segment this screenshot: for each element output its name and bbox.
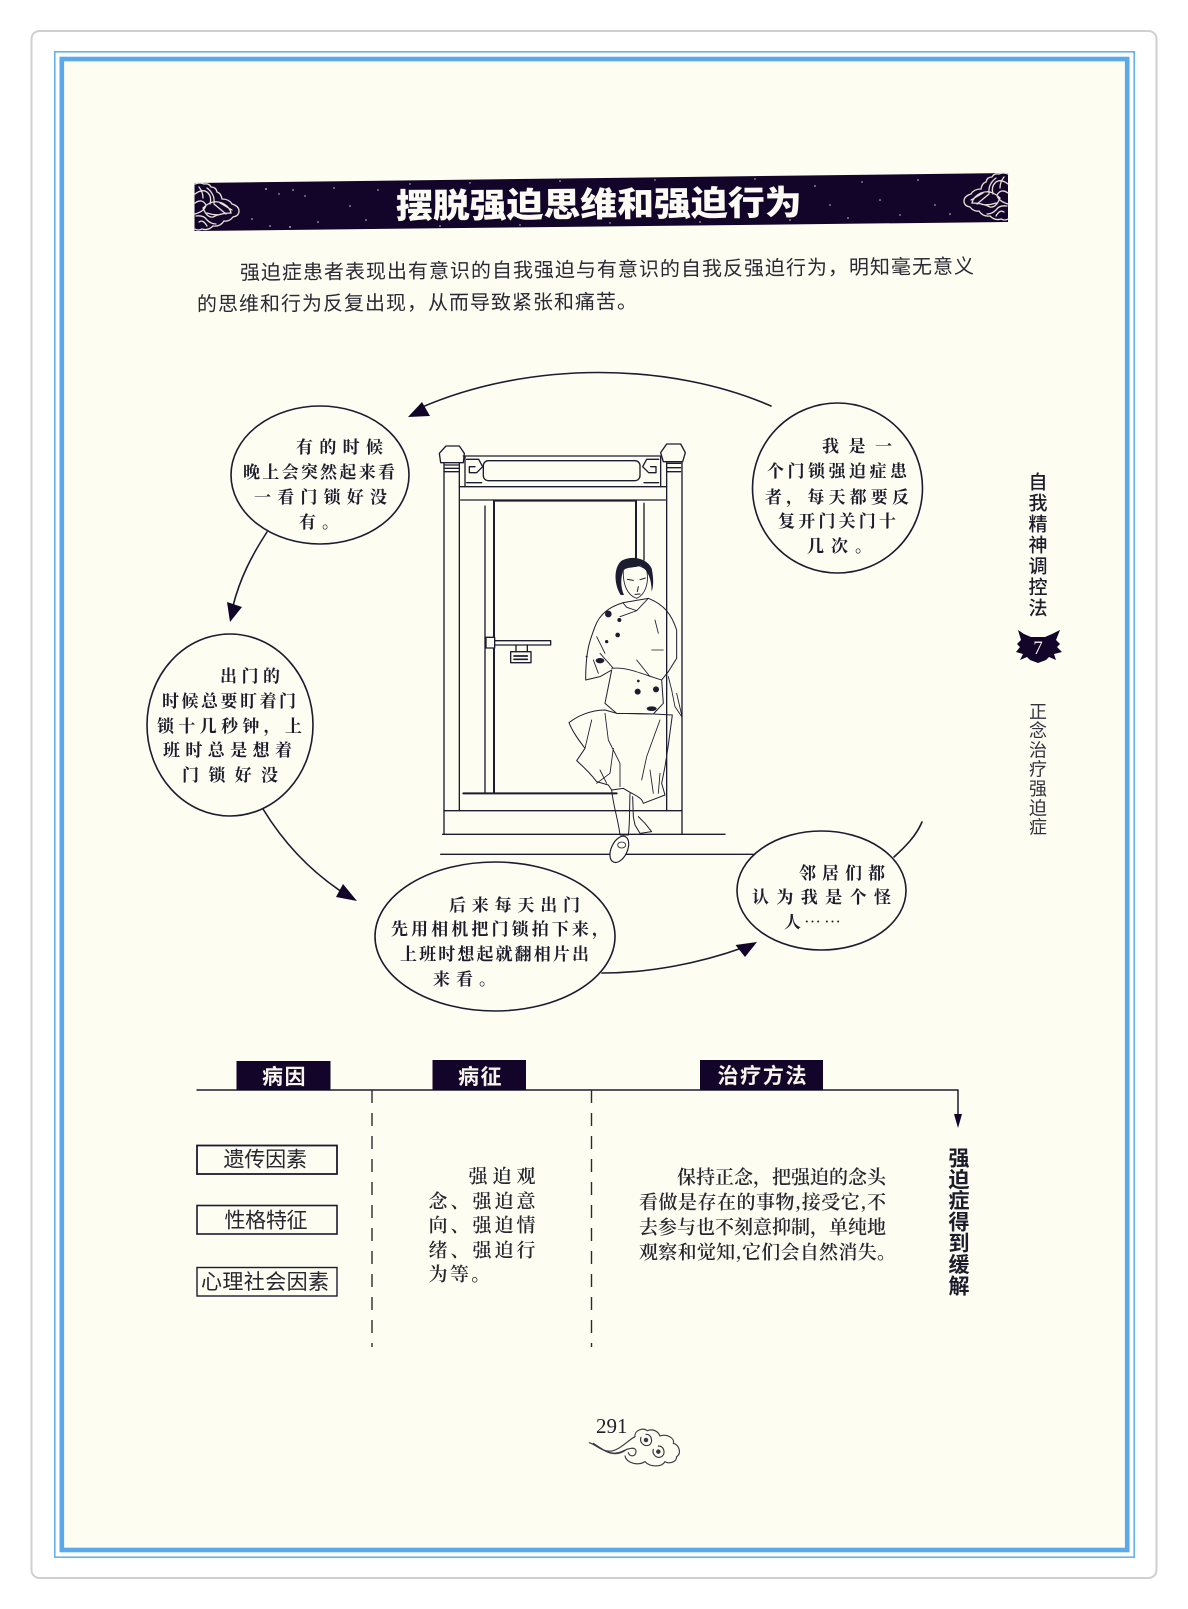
woman: [569, 558, 682, 865]
bubble: takes photos: 上班时想起就翻相片出: [400, 940, 589, 965]
shoes: [633, 797, 652, 833]
bubble: locks door repeatedly: [752, 403, 922, 573]
treatment text: 看做是存在的事物,接受它,不: [639, 1188, 887, 1214]
bubble: stares at lock: 班时总是想着: [163, 736, 292, 761]
page number: 291: [596, 1414, 628, 1438]
bubble: stares at lock: 时候总要盯着门: [162, 687, 296, 712]
bubble: locks door repeatedly: 几次。: [807, 532, 879, 557]
icon: cloud: [589, 1429, 679, 1466]
bubble: neighbours: 邻居们都: [799, 859, 885, 884]
arrow: left lower: [263, 809, 357, 901]
bubble: stares at lock: 锁十几秒钟，上: [157, 712, 302, 737]
arrow: left upper: [227, 532, 267, 622]
bubble: locks door repeatedly: 者，每天都要反: [765, 483, 909, 508]
intro paragraph: 的思维和行为反复出现，从而导致紧张和痛苦。: [197, 290, 637, 316]
icon: chapter badge: [1016, 630, 1062, 663]
icon: chapter badge: 7: [1033, 638, 1043, 659]
table rule and arrow: [197, 1090, 962, 1128]
bubble: checks at night: 有的时候: [296, 433, 383, 458]
treatment text: 去参与也不刻意抑制，单纯地: [639, 1212, 886, 1240]
bubble: stares at lock: [147, 634, 313, 816]
side label: section: 正念治疗强迫症: [1025, 702, 1051, 837]
outcome vertical text: 强迫症得到缓解: [944, 1147, 974, 1296]
padlock: [486, 637, 551, 663]
title banner: [194, 173, 1008, 231]
bubble: neighbours: [737, 831, 906, 950]
bubble: checks at night: 晚上会突然起来看: [243, 458, 395, 483]
side label: chapter: 自我精神调控法: [1024, 472, 1052, 619]
skirt: [569, 710, 672, 803]
cause box: personality: [197, 1204, 337, 1234]
bubble: checks at night: [231, 406, 409, 544]
illustration: woman at the locked door: [439, 444, 753, 865]
jacket patterns: [586, 611, 659, 711]
heading: symptoms: 病征: [458, 1061, 502, 1091]
arrow: top: [408, 372, 771, 417]
symptoms text: 向、强迫情: [428, 1210, 536, 1238]
jacket: [586, 598, 677, 714]
legs: [612, 790, 630, 835]
arrow: right connector: [894, 822, 922, 857]
banner speckles: [251, 178, 951, 228]
cause box: heredity: 遗传因素: [224, 1144, 307, 1174]
bubble: takes photos: [375, 862, 615, 1011]
heading: treatment: 治疗方法: [718, 1060, 806, 1090]
treatment text: 观察和觉知,它们会自然消失。: [639, 1238, 896, 1264]
bubble: stares at lock: 门锁好没: [182, 761, 278, 786]
bubble: takes photos: 先用相机把门锁拍下来，: [391, 915, 609, 940]
bubble: stares at lock: 出门的: [220, 662, 280, 687]
intro paragraph: [197, 255, 974, 316]
treatment text: [639, 1162, 896, 1264]
title text: 摆脱强迫思维和强迫行为: [396, 184, 802, 226]
hair: [616, 558, 653, 595]
face: [623, 565, 647, 598]
cause box: psychosocial: 心理社会因素: [201, 1266, 329, 1296]
door frame: [439, 444, 753, 854]
heading: causes: [236, 1061, 330, 1091]
bubble: locks door repeatedly: 复开门关门十: [778, 507, 896, 532]
bubble: neighbours: 人……: [784, 908, 841, 933]
cause box: heredity: [197, 1144, 337, 1174]
bubble: takes photos: 后来每天出门: [449, 891, 580, 916]
bubble: checks at night: 有。: [299, 508, 345, 533]
bubble: locks door repeatedly: 个门锁强迫症患: [767, 457, 908, 482]
bubble: takes photos: 来看。: [433, 965, 502, 990]
symptoms text: 强迫观: [468, 1162, 536, 1188]
door leaf: [463, 501, 636, 793]
symptoms text: 绪、强迫行: [428, 1236, 536, 1262]
bubble: locks door repeatedly: 我是一: [822, 432, 892, 457]
arrow: bottom: [602, 942, 757, 973]
symptoms text: [428, 1162, 536, 1286]
heading: causes: 病因: [262, 1061, 306, 1091]
heading: symptoms: [432, 1060, 526, 1091]
icon: left lotus: [195, 183, 239, 230]
cause box: personality: 性格特征: [224, 1204, 308, 1234]
column dividers: [372, 1090, 592, 1347]
skirt folds: [585, 713, 660, 793]
icon: right lotus: [964, 173, 1008, 220]
bubble: neighbours: 认为我是个怪: [752, 883, 891, 908]
bubble: checks at night: 一看门锁好没: [254, 483, 387, 508]
symptoms text: 为等。: [428, 1260, 493, 1286]
symptoms text: 念、强迫意: [428, 1186, 536, 1214]
intro paragraph: 强迫症患者表现出有意识的自我强迫与有意识的自我反强迫行为，明知毫无意义: [240, 255, 974, 284]
treatment text: 保持正念，把强迫的念头: [677, 1162, 887, 1190]
